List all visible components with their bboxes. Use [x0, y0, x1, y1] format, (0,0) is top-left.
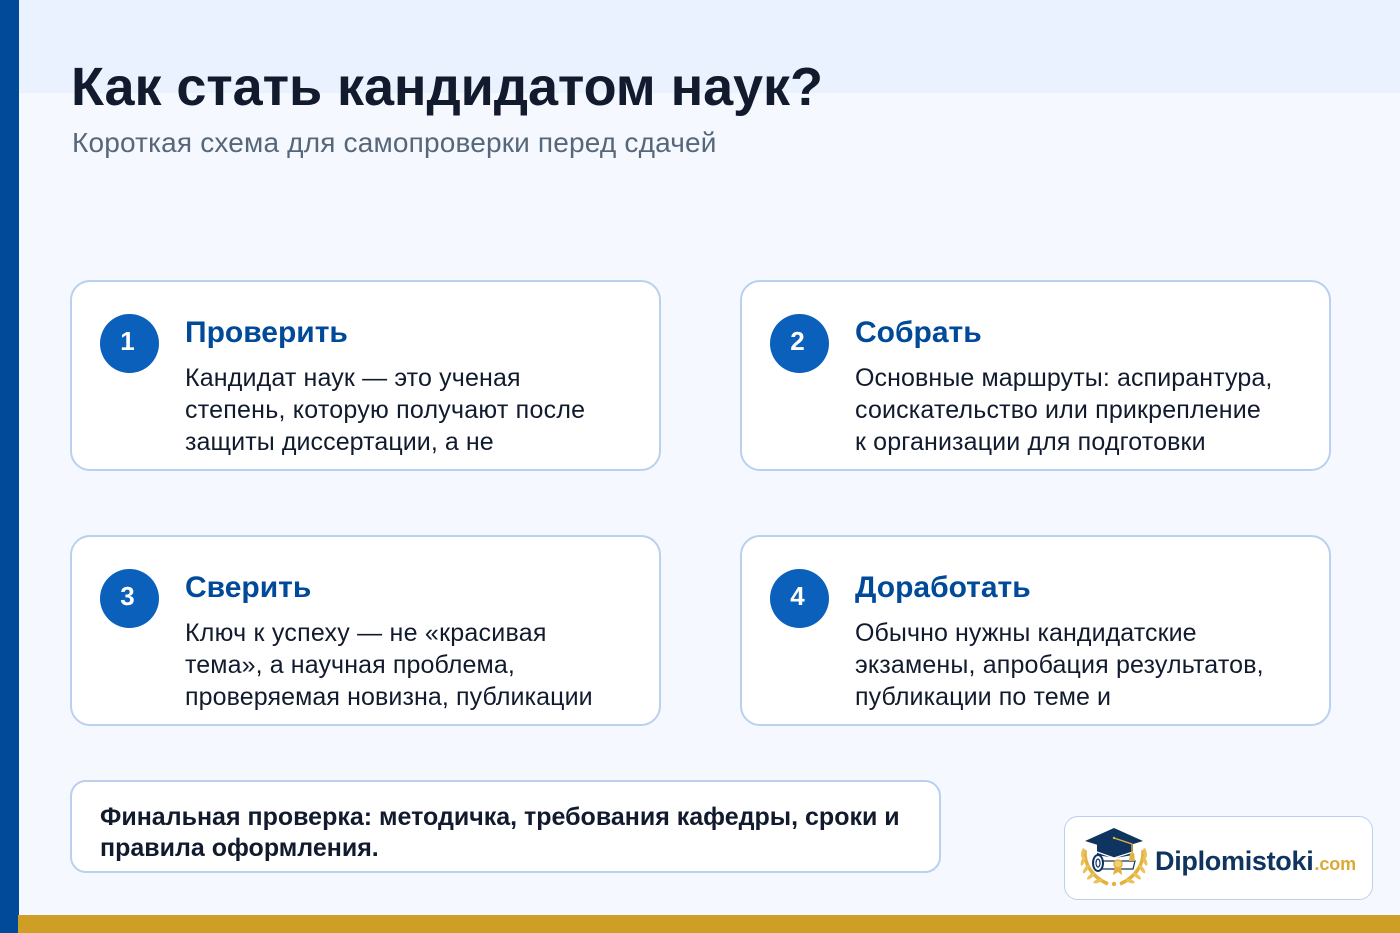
heading: step 2: Собрать — [855, 316, 982, 349]
step number 3 — [100, 569, 159, 628]
step number 2: 2 — [790, 326, 805, 356]
header band — [18, 0, 1400, 93]
step number 1 — [100, 314, 159, 373]
text: step 3: тема», а научная проблема, — [185, 651, 515, 679]
icon: graduation cap with laurel — [1080, 828, 1148, 886]
step number 2 — [770, 314, 829, 373]
step number 4 — [770, 569, 829, 628]
text: step 4: экзамены, апробация результатов, — [855, 651, 1264, 679]
text: step 1 — [185, 364, 585, 456]
text: step 3 — [185, 619, 593, 711]
text: step 2: Основные маршруты: аспирантура, — [855, 364, 1272, 392]
text: step 1: степень, которую получают после — [185, 396, 585, 424]
text: step 2: соискательство или прикрепление — [855, 396, 1261, 424]
panel: final check — [70, 780, 941, 873]
text: step 1: Кандидат наук — это ученая — [185, 364, 521, 392]
heading: step 3: Сверить — [185, 571, 311, 604]
final check text: правила оформления. — [100, 834, 379, 862]
panel: step 1 — [70, 280, 661, 471]
step number 4: 4 — [790, 581, 805, 611]
title: Как стать кандидатом наук? — [71, 57, 823, 117]
text: step 3: проверяемая новизна, публикации — [185, 683, 593, 711]
panel: step 2 — [740, 280, 1331, 471]
step number 1: 1 — [120, 326, 135, 356]
left sidebar bar — [0, 0, 19, 933]
final check text: Финальная проверка: методичка, требования кафедры, сроки и — [100, 803, 900, 831]
heading: step 4: Доработать — [855, 571, 1031, 604]
panel: logo — [1064, 816, 1373, 900]
text: step 4: Обычно нужны кандидатские — [855, 619, 1197, 647]
final check text — [100, 803, 900, 862]
text: step 3: Ключ к успеху — не «красивая — [185, 619, 547, 647]
logo wordmark: Diplomistoki.com — [1155, 846, 1356, 876]
panel: step 3 — [70, 535, 661, 726]
step number 3: 3 — [120, 581, 135, 611]
text: step 1: защиты диссертации, а не — [185, 428, 494, 456]
text: step 4: публикации по теме и — [855, 683, 1111, 711]
text: step 2: к организации для подготовки — [855, 428, 1206, 456]
text: step 2 — [855, 364, 1272, 456]
panel: step 4 — [740, 535, 1331, 726]
subtitle: Короткая схема для самопроверки перед сдачей — [72, 127, 717, 158]
text: step 4 — [855, 619, 1264, 711]
bottom gold bar — [18, 915, 1400, 933]
heading: step 1: Проверить — [185, 316, 348, 349]
